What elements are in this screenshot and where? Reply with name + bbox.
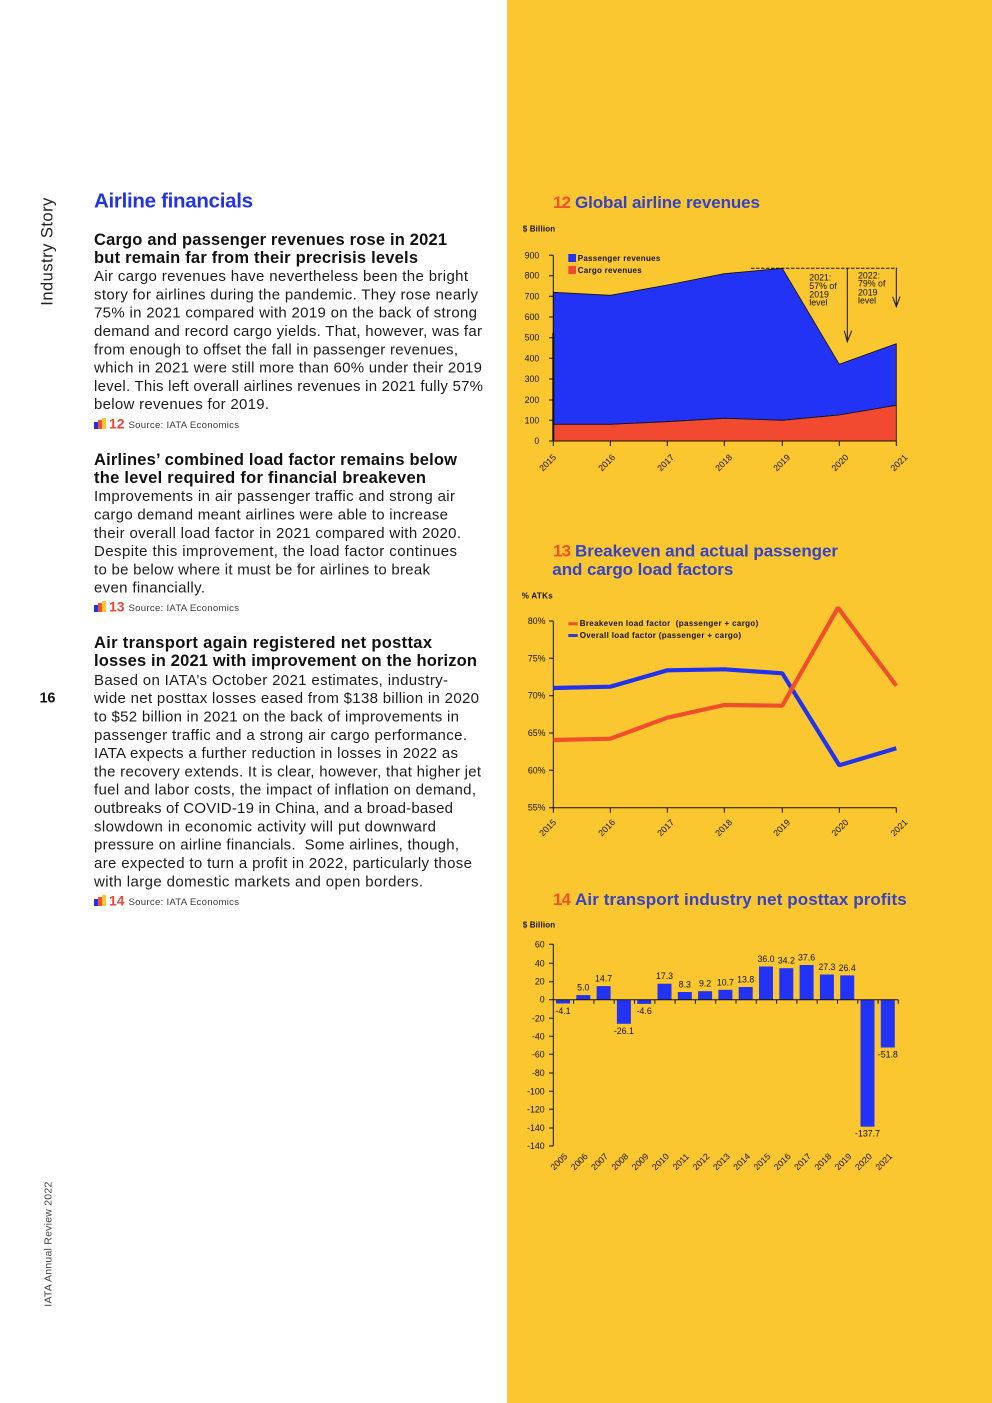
body: net posttax losses: pressure on airline financials. Some airlines, though,	[94, 837, 459, 854]
chart heading 13: Breakeven and actual passenger	[575, 542, 838, 561]
legend	[568, 619, 759, 640]
x axis labels	[537, 817, 910, 838]
legend	[568, 254, 661, 275]
callout: 2021: level	[809, 298, 827, 308]
body: net posttax losses: wide net posttax losses eased from $138 billion in 2020	[93, 690, 479, 707]
x axis labels: 2016	[772, 1151, 793, 1172]
x axis labels: 2018	[713, 817, 734, 838]
y axis labels: -80	[532, 1068, 545, 1078]
y axis labels: -140	[527, 1123, 545, 1133]
source note 14	[94, 892, 239, 908]
chart heading 13	[552, 542, 838, 579]
heading: cargo and passenger revenues	[94, 231, 447, 267]
chart heading 12: Global airline revenues	[575, 193, 760, 212]
y axis labels: 0	[540, 995, 545, 1005]
value labels: 9.2	[699, 979, 711, 989]
y axis labels: 65%	[528, 728, 546, 738]
y axis labels: 800	[525, 271, 539, 281]
body: cargo and passenger revenues: Air cargo revenues have nevertheless been the bright	[94, 268, 469, 285]
value labels: 26.4	[839, 963, 856, 973]
value labels: -26.1	[614, 1026, 634, 1036]
heading: net posttax losses: Air transport again registered net posttax	[94, 634, 433, 652]
area: cargo revenues	[553, 405, 896, 441]
x axis labels: 2021	[889, 452, 910, 473]
body: combined load factor: their overall load factor in 2021 compared with 2020.	[94, 525, 461, 542]
chart heading 14: Air transport industry net posttax profits	[575, 890, 907, 909]
axis unit: $ Billion	[523, 225, 555, 234]
body: net posttax losses	[93, 672, 482, 890]
text block: net posttax losses	[93, 634, 482, 908]
x axis labels: 2007	[589, 1151, 610, 1172]
chart heading 12: 12	[553, 193, 571, 212]
body: net posttax losses: outbreaks of COVID-19 in China, and a broad-based	[94, 800, 453, 817]
line chart: load factors	[522, 591, 910, 838]
x axis labels: 2016	[596, 452, 617, 473]
callout: 2021	[809, 273, 837, 308]
chart heading 13: 13	[553, 542, 571, 561]
x axis labels: 2020	[830, 452, 851, 473]
y axis labels: 900	[525, 250, 539, 260]
body: net posttax losses: the recovery extends. It is clear, however, that higher jet	[94, 763, 482, 780]
body: combined load factor: to be below where it must be for airlines to break	[94, 562, 430, 578]
value labels: 10.7	[717, 977, 734, 987]
line: breakeven load factor	[553, 608, 896, 740]
value labels: 36.0	[757, 954, 775, 964]
body: cargo and passenger revenues: level. This left overall airlines revenues in 2021 fully 57%	[94, 378, 483, 395]
chart heading 14: 14	[553, 890, 572, 909]
value labels: -51.8	[878, 1050, 898, 1060]
value labels: 14.7	[595, 974, 612, 984]
body: cargo and passenger revenues: from enough to offset the fall in passenger revenues,	[94, 342, 458, 358]
callout: 2022: 79% of	[858, 279, 886, 289]
y axis labels: 600	[525, 312, 539, 322]
page number: 16	[40, 691, 56, 707]
source note 14: 14	[109, 892, 125, 908]
body: net posttax losses: IATA expects a further reduction in losses in 2022 as	[94, 745, 458, 762]
axes	[549, 621, 896, 813]
body: cargo and passenger revenues: which in 2021 were still more than 60% under their 2019	[93, 360, 482, 376]
icon: mini bar chart	[94, 418, 106, 429]
x axis labels: 2021	[889, 817, 910, 838]
x axis labels: 2019	[771, 817, 792, 838]
callout: 2022: 2019	[858, 287, 878, 297]
chart heading 13: and cargo load factors	[552, 560, 733, 579]
body: net posttax losses: slowdown in economic activity will put downward	[94, 818, 436, 835]
y axis labels: 0	[534, 436, 539, 446]
body: cargo and passenger revenues: 75% in 2021 compared with 2019 on the back of strong	[94, 304, 477, 322]
callout: 2022: level	[858, 296, 876, 306]
heading: net posttax losses	[94, 634, 477, 670]
value labels: 34.2	[778, 956, 795, 966]
source note 12: Source: IATA Economics	[128, 420, 239, 431]
x axis labels: 2018	[812, 1151, 833, 1172]
x axis labels: 2010	[650, 1151, 671, 1172]
arrow: 2022	[893, 268, 900, 307]
heading: combined load factor	[94, 451, 457, 487]
x axis labels: 2015	[537, 452, 558, 473]
source note 12: 12	[109, 416, 125, 432]
x axis labels: 2020	[853, 1151, 874, 1172]
x axis labels: 2017	[655, 452, 676, 473]
source note 14: Source: IATA Economics	[128, 897, 239, 908]
y axis labels: 200	[525, 395, 539, 405]
heading: cargo and passenger revenues: but remain far from their precrisis levels	[94, 249, 418, 267]
body: net posttax losses: fuel and labor costs, the impact of inflation on demand,	[94, 782, 476, 798]
text block: combined load factor	[94, 451, 461, 614]
value labels: -137.7	[855, 1129, 880, 1139]
line: overall load factor	[553, 669, 896, 765]
body: combined load factor	[94, 488, 461, 597]
y axis labels: -40	[532, 1031, 545, 1041]
x axis labels: 2021	[873, 1151, 894, 1172]
y axis labels: 55%	[528, 803, 546, 813]
x axis labels: 2008	[609, 1151, 630, 1172]
body: combined load factor: Improvements in air passenger traffic and strong air	[94, 488, 455, 505]
callout: 2021: 57% of	[809, 281, 837, 291]
heading: combined load factor: Airlines’ combined load factor remains below	[94, 451, 457, 469]
legend: Breakeven load factor (passenger + cargo)	[580, 619, 759, 628]
y axis labels: 40	[535, 958, 545, 968]
body: cargo and passenger revenues	[93, 268, 483, 413]
y axis labels: -140	[527, 1141, 545, 1151]
legend: Overall load factor (passenger + cargo)	[580, 631, 741, 640]
arrow: 2021	[844, 268, 852, 342]
y axis labels: 100	[525, 415, 539, 425]
y axis labels: -100	[527, 1086, 545, 1096]
y axis labels	[527, 939, 545, 1151]
source note 13	[94, 598, 239, 614]
body: combined load factor: Despite this improvement, the load factor continues	[94, 543, 457, 560]
value labels: 5.0	[577, 983, 590, 993]
y axis labels: 500	[525, 333, 539, 343]
heading: net posttax losses: losses in 2021 with improvement on the horizon	[94, 652, 477, 670]
y axis labels: 700	[525, 291, 539, 301]
panel: yellow charts column	[507, 0, 992, 1403]
y axis labels: -120	[527, 1104, 545, 1114]
x axis labels: 2017	[655, 817, 676, 838]
value labels	[555, 952, 898, 1139]
value labels: 27.3	[818, 962, 836, 972]
body: combined load factor: even financially.	[94, 580, 205, 597]
value labels: 13.8	[737, 974, 754, 984]
x axis labels: 2018	[713, 452, 734, 473]
y axis labels: 70%	[528, 691, 546, 701]
axes	[549, 944, 898, 1146]
x axis labels: 2013	[711, 1151, 732, 1172]
value labels: 8.3	[679, 980, 691, 990]
publication label: IATA Annual Review 2022	[42, 1182, 54, 1307]
body: combined load factor: cargo demand meant airlines were able to increase	[94, 507, 448, 524]
text block: cargo and passenger revenues	[93, 231, 483, 432]
x axis labels: 2019	[771, 452, 792, 473]
reference line: 2019 level	[751, 267, 897, 269]
body: net posttax losses: passenger traffic and a strong air cargo performance.	[94, 727, 467, 744]
callout: 2022	[858, 271, 886, 306]
legend: Cargo revenues	[578, 266, 642, 275]
y axis labels: 60	[535, 939, 545, 949]
x axis labels: 2011	[671, 1151, 691, 1172]
x axis labels: 2006	[569, 1151, 590, 1172]
icon: mini bar chart	[94, 895, 106, 906]
source note 13: Source: IATA Economics	[128, 603, 239, 614]
heading: cargo and passenger revenues: Cargo and passenger revenues rose in 2021	[94, 231, 447, 249]
x axis labels: 2016	[596, 817, 617, 838]
y axis labels: 60%	[528, 765, 546, 775]
y axis labels: -20	[532, 1013, 545, 1023]
body: net posttax losses: Based on IATA’s October 2021 estimates, industry-	[94, 672, 448, 689]
body: net posttax losses: with large domestic markets and open borders.	[93, 873, 423, 890]
x axis labels	[549, 1151, 894, 1172]
y axis labels	[525, 250, 539, 446]
bars	[556, 965, 895, 1127]
bar chart: net posttax profits	[523, 920, 898, 1172]
legend: Passenger revenues	[578, 254, 661, 263]
y axis labels: 20	[535, 977, 545, 987]
x axis labels	[537, 452, 910, 473]
value labels: -4.1	[555, 1006, 571, 1016]
x axis labels: 2015	[537, 817, 558, 838]
body: net posttax losses: to $52 billion in 2021 on the back of improvements in	[94, 708, 459, 726]
x axis labels: 2015	[752, 1151, 773, 1172]
x axis labels: 2005	[549, 1151, 570, 1172]
value labels: 17.3	[656, 971, 673, 981]
callout: 2021: 2021:	[809, 273, 831, 283]
icon: mini bar chart	[94, 601, 106, 612]
axis unit: $ Billion	[523, 920, 555, 929]
area: passenger revenues	[553, 268, 896, 424]
area chart: global airline revenues	[523, 225, 910, 473]
axes	[549, 255, 896, 446]
heading: combined load factor: the level required for financial breakeven	[94, 469, 426, 487]
value labels: 37.6	[798, 952, 815, 962]
section label: Industry Story: Industry Story	[38, 197, 56, 306]
y axis labels: -60	[532, 1049, 545, 1059]
page title: Airline financials	[94, 190, 253, 213]
x axis labels: 2014	[731, 1151, 752, 1172]
y axis labels	[528, 616, 546, 813]
value labels: -4.6	[637, 1006, 652, 1016]
axis unit: % ATKs	[522, 591, 553, 600]
y axis labels: 75%	[528, 653, 546, 663]
callout: 2022: 2022:	[858, 271, 880, 281]
body: cargo and passenger revenues: story for airlines during the pandemic. They rose nearly	[94, 286, 478, 304]
x axis labels: 2017	[792, 1151, 813, 1172]
body: cargo and passenger revenues: demand and record cargo yields. That, however, was far	[94, 323, 482, 340]
x axis labels: 2012	[691, 1151, 712, 1172]
y axis labels: 300	[525, 374, 539, 384]
y axis labels: 400	[525, 353, 539, 363]
x axis labels: 2020	[830, 817, 851, 838]
callout: 2021: 2019	[809, 290, 829, 300]
source note 12	[94, 416, 239, 432]
y axis labels: 80%	[528, 616, 546, 626]
body: net posttax losses: are expected to turn a profit in 2022, particularly those	[94, 855, 472, 872]
x axis labels: 2019	[833, 1151, 854, 1172]
body: cargo and passenger revenues: below revenues for 2019.	[94, 396, 269, 413]
source note 13: 13	[109, 598, 125, 614]
x axis labels: 2009	[630, 1151, 651, 1172]
